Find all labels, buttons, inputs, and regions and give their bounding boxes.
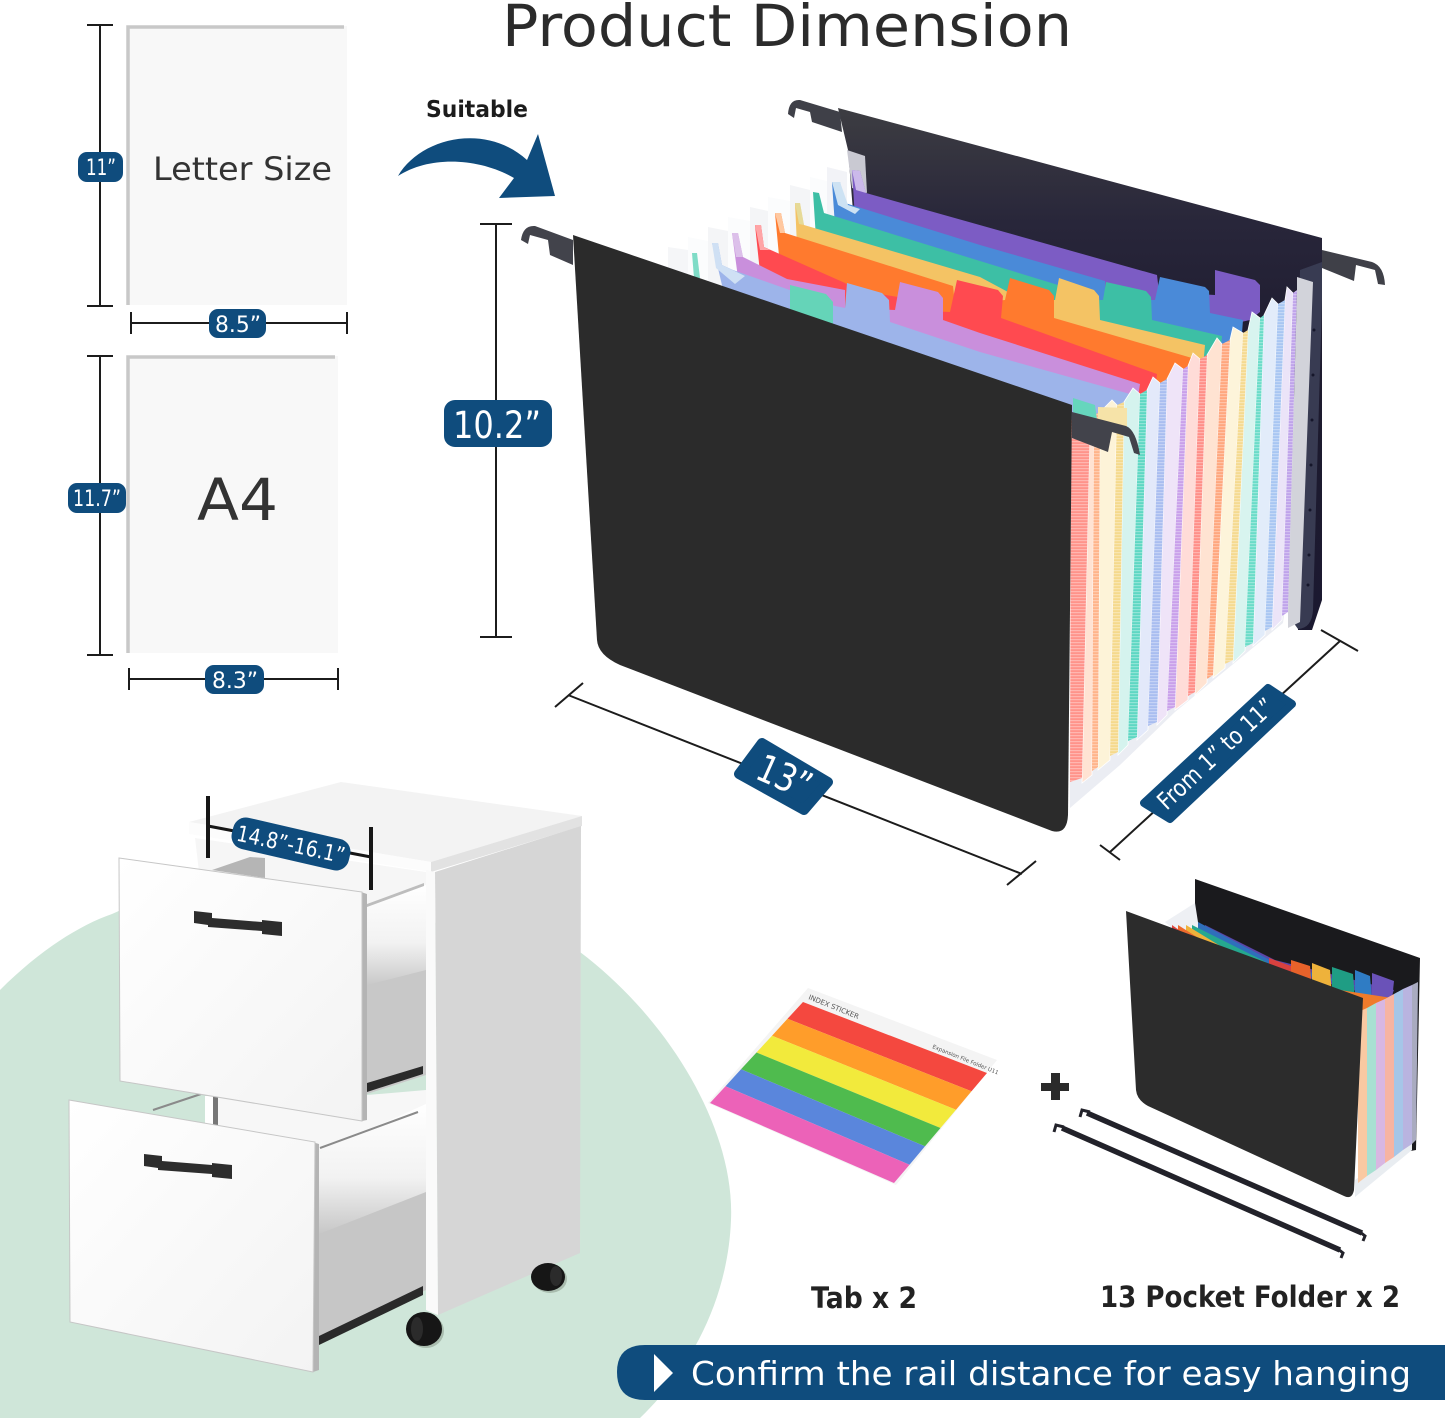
dimension: from 1 to 11 inch depth: From 1” to 11” bbox=[1152, 693, 1280, 815]
main expanding folder bbox=[521, 100, 1385, 832]
pale pleats upper left bbox=[668, 167, 847, 300]
dimension: 8.5 inch width: 8.5” bbox=[215, 313, 261, 338]
divider: yellow bbox=[795, 203, 1205, 400]
divider: periwinkle bbox=[712, 243, 1130, 470]
middle section bbox=[218, 1090, 426, 1152]
front rail clips bbox=[521, 226, 1140, 455]
small folder tabs bbox=[1269, 958, 1394, 1012]
back cover bbox=[838, 108, 1322, 630]
dimension: 11 inch height bbox=[78, 25, 123, 306]
dimension: 13 inch width bbox=[555, 683, 1036, 885]
cabinet top bbox=[189, 782, 582, 862]
upper drawer interior bbox=[367, 885, 426, 990]
dimension: 14.8 to 16.1 inch rail distance bbox=[208, 796, 371, 890]
accordion side: saturated pleat strips bbox=[1070, 290, 1297, 782]
front cover bbox=[573, 235, 1072, 832]
icon: play triangle bbox=[654, 1354, 673, 1392]
divider: blue bbox=[832, 182, 1243, 360]
small folder front bbox=[1126, 911, 1363, 1197]
dimension: 11.7 inch height bbox=[68, 356, 126, 655]
divider: orchid bbox=[732, 233, 1140, 450]
small folder pleats bbox=[1358, 982, 1418, 1183]
dimension: 13 inch width: 13” bbox=[750, 746, 819, 809]
icon: plus sign bbox=[1041, 1073, 1069, 1100]
small folder bottom edge bbox=[1355, 1140, 1412, 1197]
icon: curved arrow bbox=[398, 134, 555, 198]
tab sticker sheet: Expansion File Folder U11 bbox=[931, 1044, 999, 1076]
dimension: 8.5 inch width bbox=[131, 309, 347, 338]
cabinet front post bbox=[426, 870, 438, 1315]
small folder dividers bbox=[1165, 903, 1394, 1000]
dimension: 10.2 inch height: 10.2” bbox=[453, 404, 541, 447]
upper handle bbox=[194, 911, 282, 936]
tab label: Tab x 2 bbox=[811, 1281, 917, 1315]
wheels bbox=[406, 1263, 567, 1348]
letter size label: Letter Size bbox=[153, 150, 332, 188]
panel: letter size paper bbox=[127, 26, 347, 305]
panel: A4 paper bbox=[127, 356, 338, 653]
suitable label: Suitable bbox=[426, 97, 528, 123]
divider: teal bbox=[813, 192, 1222, 380]
cabinet side bbox=[435, 826, 581, 1315]
accordion side: bottom translucent edge bbox=[1070, 500, 1300, 808]
small folder back bbox=[1195, 879, 1420, 1152]
pleat comb texture bbox=[1070, 290, 1297, 782]
dimension: 11.7 inch height: 11.7” bbox=[73, 487, 121, 512]
back rail clips bbox=[788, 100, 1385, 285]
hanging rails bbox=[1054, 1110, 1365, 1258]
divider: red bbox=[755, 225, 1157, 440]
dimension: 8.3 inch width bbox=[129, 665, 338, 694]
divider left pale slivers bbox=[692, 170, 866, 284]
A4 label: A4 bbox=[197, 466, 278, 534]
tab sticker sheet bbox=[708, 988, 999, 1185]
accordion side: pale pleat faces bbox=[1082, 287, 1293, 783]
divider: orange bbox=[775, 213, 1192, 420]
filing cabinet bbox=[69, 782, 582, 1372]
rear edge strip with dots bbox=[1293, 262, 1322, 629]
banner text: Confirm the rail distance for easy hanging bbox=[691, 1354, 1411, 1393]
lower handle bbox=[144, 1154, 232, 1179]
area behind upper drawer bbox=[195, 838, 426, 906]
pocket folder label: 13 Pocket Folder x 2 bbox=[1100, 1280, 1400, 1314]
green background blob bbox=[0, 875, 731, 1418]
sticker small text: INDEX STICKER bbox=[807, 993, 860, 1021]
dimension: 14.8 to 16.1 inch rail distance: 14.8”-16.1” bbox=[234, 822, 347, 869]
upper drawer front bbox=[361, 892, 367, 1121]
dimension: 10.2 inch height bbox=[444, 224, 552, 637]
binding strip bbox=[847, 150, 867, 193]
small color patches above clip bbox=[1073, 398, 1127, 430]
dimension: 11 inch height: 11” bbox=[86, 156, 116, 181]
dimension: from 1 to 11 inch depth bbox=[1100, 630, 1358, 860]
grey last pleat bbox=[1288, 277, 1313, 628]
divider: mint tab bbox=[790, 285, 833, 325]
lower drawer front bbox=[312, 1142, 319, 1372]
dimension: 8.3 inch width: 8.3” bbox=[212, 669, 258, 694]
lower drawer interior bbox=[319, 1104, 426, 1238]
divider: purple bbox=[852, 170, 1260, 330]
small folder bbox=[1126, 879, 1420, 1197]
callout banner bbox=[617, 1345, 1445, 1400]
